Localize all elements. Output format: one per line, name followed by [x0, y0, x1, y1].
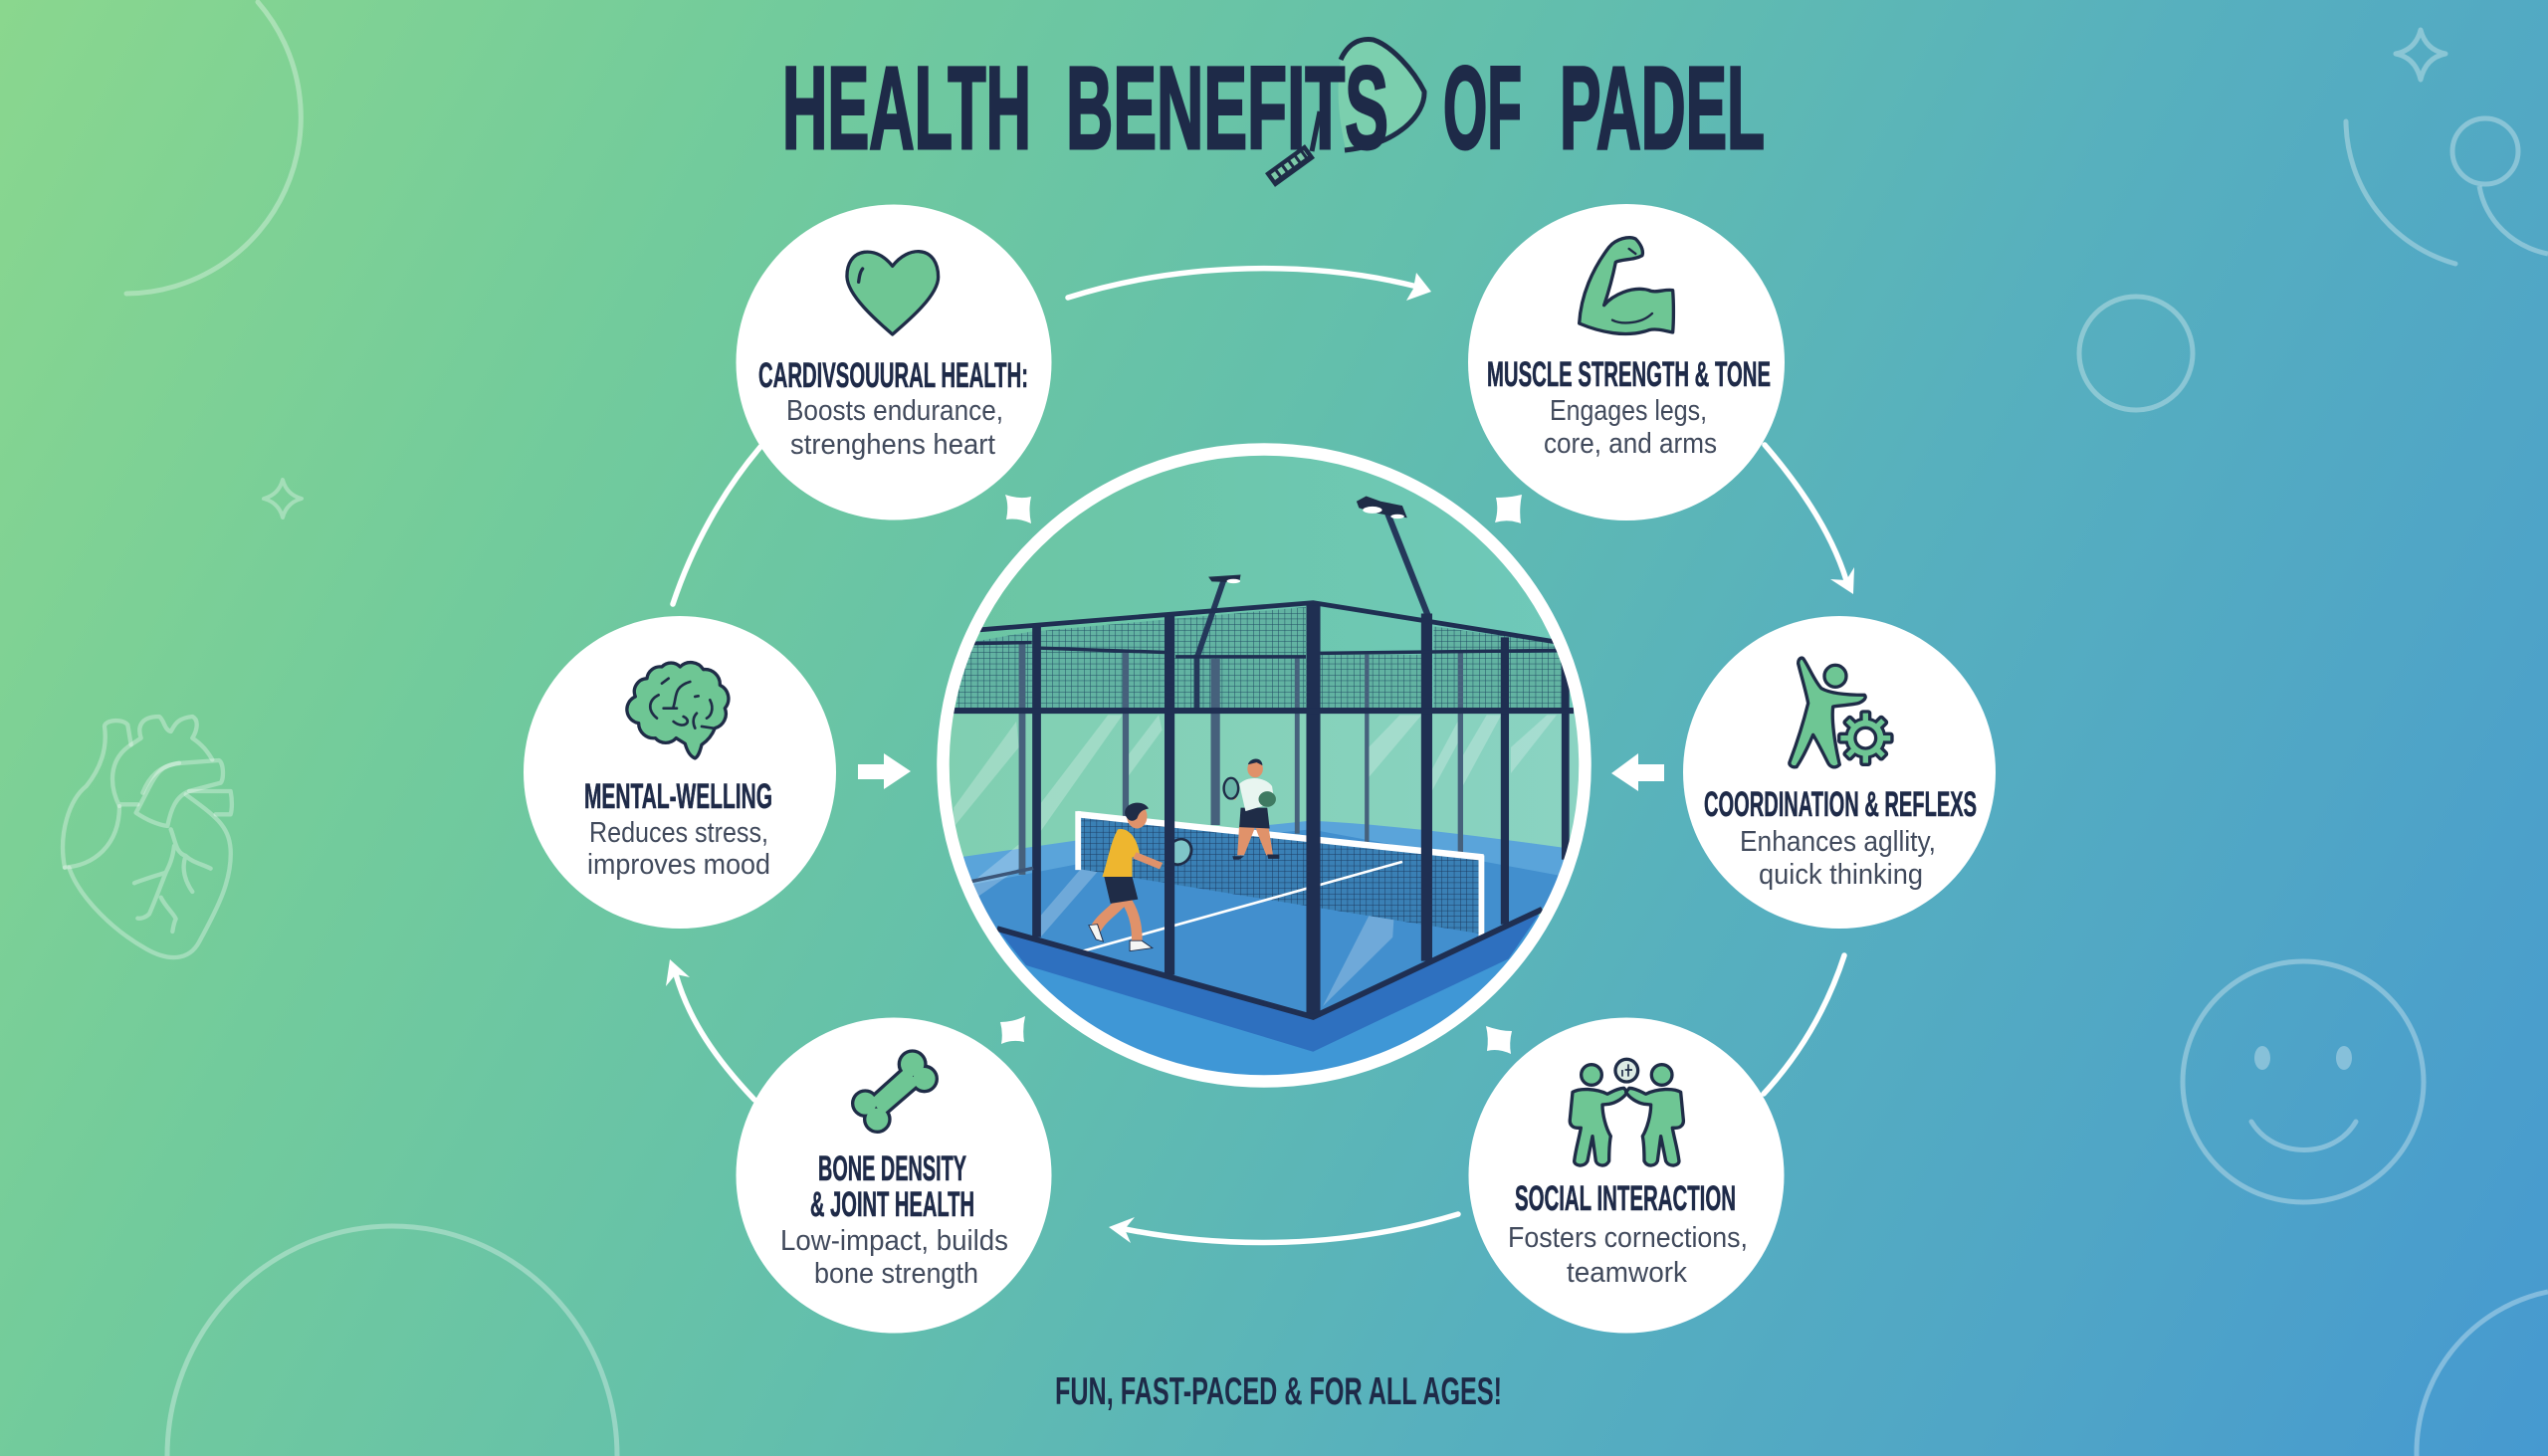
glass reflections — [954, 715, 1557, 1006]
title — [782, 40, 1765, 180]
court centre line — [1083, 862, 1402, 951]
icon: flexed arm — [1580, 238, 1673, 333]
title text: Health Benefits of Padel: HEALTH — [782, 43, 1031, 174]
icon: padel racket behind title — [1270, 40, 1424, 180]
front frame posts and rails — [952, 603, 1574, 1017]
icon: two people high five — [1570, 1059, 1683, 1165]
heading: bone density — [810, 1149, 974, 1224]
description: cardiovascular: strenghens heart — [790, 429, 995, 461]
title text: Health Benefits of Padel: BENEFITS — [1066, 43, 1388, 174]
decor: top-right small circle with tail — [2452, 118, 2548, 254]
decor: anatomical heart outline — [63, 717, 232, 957]
description: mental wellbeing — [587, 817, 770, 881]
decor: top-right arc — [2346, 121, 2455, 264]
description: bone density: bone strength — [814, 1258, 978, 1290]
panel: muscle strength — [1468, 204, 1785, 520]
description: coordination: quick thinking — [1759, 859, 1923, 891]
icon: figure with gear — [1790, 658, 1892, 767]
arrow: coordination to social — [1764, 955, 1844, 1094]
description: social: teamwork — [1567, 1257, 1687, 1289]
connector diamond: bottom-left — [1000, 1016, 1025, 1044]
decor: bottom-left circle — [167, 1226, 617, 1456]
central padel court illustration — [940, 450, 1591, 1089]
heading: muscle: MUSCLE STRENGTH & TONE — [1487, 355, 1771, 394]
arrow: left block arrow into court — [858, 753, 911, 789]
connector diamond: top-right — [1495, 495, 1522, 523]
footer tagline: FUN, FAST-PACED & FOR ALL AGES! — [1055, 1370, 1502, 1413]
panel: coordination and reflexes — [1683, 616, 1996, 929]
cycle arrows — [666, 269, 1854, 1243]
floodlight poles — [1197, 580, 1224, 657]
description: cardiovascular: Boosts endurance, — [786, 395, 1003, 427]
description: coordination: Enhances agllity, — [1740, 826, 1936, 858]
player far side — [1224, 759, 1279, 860]
description: muscle: Engages legs, — [1550, 395, 1707, 427]
net — [1079, 816, 1480, 934]
back posts — [1019, 644, 1463, 875]
arrow: right block arrow into court — [1611, 753, 1664, 791]
court frame ring — [944, 450, 1585, 1081]
description: bone density — [780, 1225, 1008, 1290]
connector diamond: top-left — [1005, 495, 1031, 523]
description: social — [1508, 1222, 1748, 1289]
arrow: social to bone — [1109, 1214, 1458, 1243]
player near side — [1089, 803, 1195, 951]
description: coordination — [1740, 826, 1936, 891]
description: social: Fosters cornections, — [1508, 1222, 1748, 1254]
back floor strips — [958, 821, 1572, 886]
heading: mental wellbeing: MENTAL-WELLING — [584, 777, 772, 816]
title text: Health Benefits of Padel — [782, 43, 1765, 174]
lower blue apron — [995, 916, 1539, 1075]
decor: right circle — [2079, 297, 2193, 410]
icon: heart — [847, 252, 939, 334]
decor: smiley face — [2183, 961, 2424, 1202]
icon: bone — [854, 1053, 936, 1131]
decor: top-right sparkle — [2396, 30, 2445, 80]
description: bone density: Low-impact, builds — [780, 1225, 1008, 1257]
arrow: bone to mental — [666, 959, 754, 1100]
title text: Health Benefits of Padel: OF — [1443, 43, 1522, 174]
description: mental wellbeing: improves mood — [587, 849, 770, 881]
panel: cardiovascular health — [737, 205, 1051, 520]
panel: mental wellbeing — [524, 616, 836, 929]
dark apron edge — [997, 910, 1542, 1052]
heading: bone density: & JOINT HEALTH — [810, 1185, 974, 1224]
icon: brain — [627, 663, 729, 758]
upper mesh panels — [956, 607, 1306, 709]
description: mental wellbeing: Reduces stress, — [589, 817, 768, 849]
arrow: mental to cardio — [673, 447, 760, 604]
panel: social interaction — [1469, 1017, 1784, 1334]
description: cardiovascular — [786, 395, 1003, 461]
connector diamond: bottom-right — [1486, 1026, 1512, 1054]
title text: Health Benefits of Padel: PADEL — [1560, 43, 1765, 174]
heading: bone density: BONE DENSITY — [818, 1149, 966, 1188]
description: muscle — [1544, 395, 1717, 460]
court scene — [940, 450, 1591, 1089]
heading: coordination: COORDINATION & REFLEXS — [1704, 785, 1977, 824]
heading: social: SOCIAL INTERACTION — [1515, 1179, 1736, 1218]
panel: bone density — [737, 1017, 1051, 1334]
decor: left sparkle — [264, 480, 302, 518]
arrow: muscle to coordination — [1765, 445, 1854, 594]
description: muscle: core, and arms — [1544, 428, 1717, 460]
decor: top-left arc — [126, 2, 301, 294]
decor: bottom-right arc — [2417, 1292, 2548, 1456]
arrow: cardio to muscle — [1068, 269, 1431, 301]
heading: cardiovascular: CARDIVSOUURAL HEALTH: — [758, 356, 1028, 395]
main blue floor — [973, 830, 1559, 916]
